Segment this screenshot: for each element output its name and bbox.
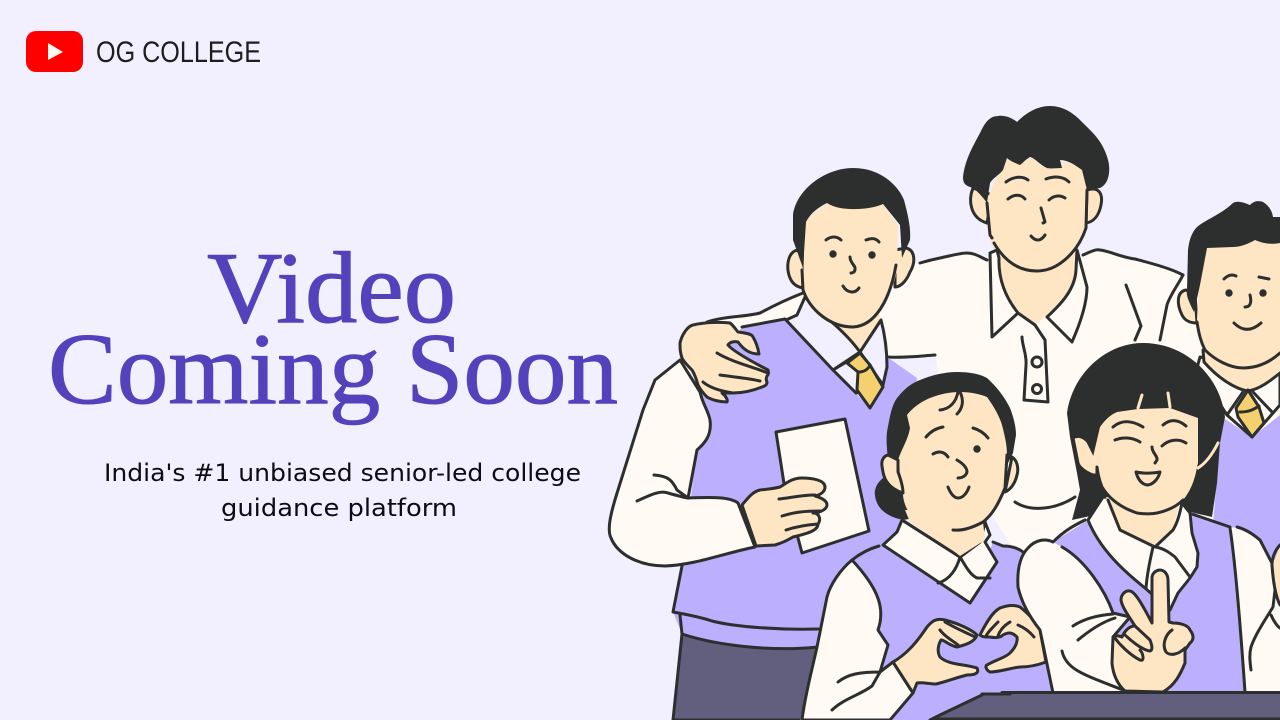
eyes and brows <box>1225 289 1233 297</box>
student: front right girl <box>1018 343 1280 693</box>
hair <box>963 106 1109 203</box>
title: Video <box>207 232 456 345</box>
hand holding paper <box>742 478 827 546</box>
paper <box>776 419 869 553</box>
student: front left girl <box>800 372 1075 720</box>
trousers <box>673 634 818 720</box>
hair curl <box>940 392 962 414</box>
vest <box>673 319 917 670</box>
eyes and brows <box>1113 421 1186 446</box>
brand name: OG COLLEGE <box>96 36 261 69</box>
placket with buttons <box>1018 313 1048 402</box>
hands forming heart <box>893 619 978 693</box>
face <box>1197 235 1280 368</box>
collar <box>786 297 860 370</box>
vest <box>1210 415 1280 560</box>
collar <box>883 520 997 603</box>
fringe highlights <box>1138 393 1170 408</box>
neck <box>905 510 985 556</box>
student: back centre boy <box>707 106 1205 560</box>
vest <box>1053 512 1245 692</box>
ear <box>1178 290 1197 323</box>
face <box>898 392 1007 556</box>
shirt <box>1160 275 1280 560</box>
face <box>803 203 898 327</box>
bun <box>875 478 916 520</box>
gap under arm <box>887 355 938 380</box>
sleeve <box>802 560 913 720</box>
shirt <box>707 250 1205 560</box>
left ear <box>882 455 903 493</box>
right ear <box>1005 457 1018 492</box>
long hair back <box>1067 343 1225 520</box>
ears <box>788 250 805 288</box>
nose and mouth <box>1031 208 1045 240</box>
subtitle <box>104 459 581 522</box>
back hair <box>887 372 1016 480</box>
right ear sliver <box>1198 443 1218 468</box>
neck <box>1106 497 1180 547</box>
peace hand <box>1112 570 1193 692</box>
face <box>1093 408 1198 513</box>
sleeve left <box>1018 540 1130 693</box>
eyes and brows <box>829 250 837 258</box>
nose and mouth <box>843 257 859 292</box>
subtitle: guidance platform <box>221 494 457 522</box>
student: right boy <box>1160 201 1280 560</box>
collar <box>1088 497 1198 610</box>
nose <box>1152 447 1157 463</box>
icon: youtube play button <box>26 31 83 72</box>
tie <box>847 353 883 408</box>
title <box>48 232 618 426</box>
tie <box>1236 390 1264 437</box>
face <box>987 155 1087 272</box>
subtitle: India's #1 unbiased senior-led college <box>104 459 581 487</box>
hair <box>793 168 910 268</box>
neck <box>806 300 880 352</box>
vest <box>800 542 1075 720</box>
hand on shoulder from centre boy <box>680 322 768 402</box>
illustration: group of students <box>609 106 1280 720</box>
sleeve <box>609 360 755 566</box>
left ear <box>1073 436 1097 475</box>
hair <box>1187 201 1280 312</box>
eyes and brows <box>926 427 988 457</box>
neck and collar <box>1197 357 1280 437</box>
brows and eyes <box>1006 177 1069 200</box>
logo <box>26 31 261 72</box>
title: Coming Soon <box>48 313 618 426</box>
collar <box>990 250 1018 337</box>
sleeve right <box>1230 527 1280 692</box>
desk <box>928 693 1280 720</box>
student: left boy <box>609 168 917 720</box>
neck <box>995 250 1077 325</box>
nose and mouth <box>1234 295 1261 329</box>
nose and mouth <box>948 460 969 498</box>
left ear <box>971 188 992 223</box>
mouth <box>1136 472 1160 485</box>
right ear <box>1086 189 1102 223</box>
